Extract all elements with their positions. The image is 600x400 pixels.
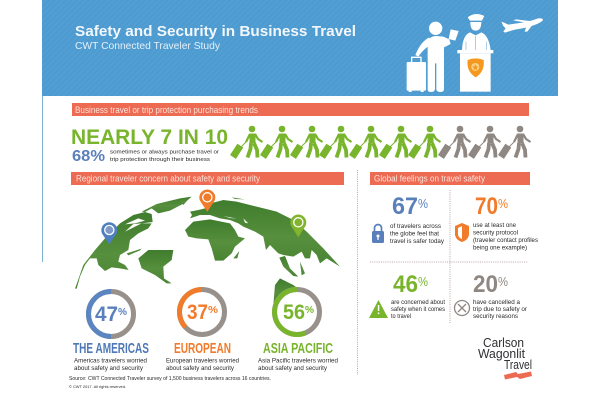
stat: 67 percent: 67	[392, 193, 418, 220]
region label: European: European travelers worried	[166, 358, 239, 364]
icon: shield	[455, 223, 469, 242]
region label: European: EUROPEAN	[174, 340, 231, 357]
section bar: purchasing trends	[72, 103, 529, 116]
region label: Asia Pacific: ASIA PACIFIC	[263, 340, 333, 357]
region label: the Americas: THE AMERICAS	[73, 340, 149, 357]
map pin: Americas	[101, 222, 117, 244]
stat: 20 percent: have cancelled a	[473, 299, 521, 306]
ring chart: Asia Pacific 56 percent: %	[305, 305, 314, 316]
ring chart: the Americas 47 percent: %	[118, 307, 127, 318]
text: 68 percent description	[110, 150, 219, 163]
ring chart: Asia Pacific 56 percent	[272, 287, 322, 337]
logo: Carlson Wagonlit Travel: Carlson	[483, 336, 524, 350]
map pin: Europe	[199, 190, 215, 212]
left page edge line	[42, 96, 43, 262]
stat: 20 percent	[454, 271, 527, 320]
ring chart: European 37 percent	[177, 287, 227, 337]
stat: 70 percent: security protocol	[473, 230, 518, 236]
ring chart: the Americas 47 percent	[86, 289, 136, 339]
stat: 68 percent: 68%	[72, 148, 105, 165]
stat: 20 percent: security reasons	[473, 313, 518, 320]
region label: Asia Pacific: about safety and security	[258, 365, 328, 372]
map: the Americas	[75, 197, 192, 289]
map: Europe, Africa, Asia and Australia	[180, 197, 340, 305]
stat: 46 percent: 46	[393, 271, 418, 298]
map pin: Asia Pacific	[290, 215, 306, 237]
source note	[69, 376, 271, 389]
stat: 20 percent: %	[498, 274, 508, 289]
section bar: regional concern: Regional traveler concern about safety and security	[76, 174, 260, 184]
stat: 70 percent: being one example)	[473, 244, 527, 252]
stat: 67 percent: %	[418, 196, 428, 211]
stat: 20 percent: trip due to safety or	[473, 306, 527, 313]
region label: European	[166, 340, 239, 372]
source note: Source: CWT Connected Traveler survey of 1,500 business travelers across 16 countries.	[69, 376, 271, 382]
stat: 46 percent	[369, 271, 445, 320]
source note: © CWT 2017. All rights reserved.	[69, 384, 126, 389]
stat: 67 percent	[372, 193, 445, 245]
region label: Asia Pacific: Asia Pacific travelers worried	[258, 358, 338, 364]
region label: the Americas: about safety and security	[74, 365, 144, 372]
ring chart: European 37 percent: %	[208, 305, 218, 316]
stat: 46 percent: safety when it comes	[391, 306, 445, 313]
stat: 67 percent: of travelers across	[390, 223, 441, 230]
header banner	[42, 0, 558, 96]
pictogram: ten walking travelers, seven green	[230, 126, 530, 159]
stat: 20 percent: 20	[473, 271, 498, 298]
icon: padlock	[372, 225, 384, 243]
ring chart: Asia Pacific 56 percent: 56	[283, 301, 305, 324]
section bar: regional concern	[71, 172, 344, 185]
stat: 67 percent: travel is safer today	[390, 238, 445, 245]
ring chart: European 37 percent: 37	[187, 301, 208, 324]
stat: 46 percent: to travel	[391, 313, 411, 320]
stat: 70 percent: use at least one	[473, 222, 517, 229]
logo: Carlson Wagonlit Travel: Wagonlit	[478, 347, 526, 361]
logo: Carlson Wagonlit Travel	[478, 336, 532, 380]
world map hemisphere	[75, 197, 340, 305]
section bar: global feelings	[370, 172, 530, 185]
stat: 70 percent	[455, 193, 538, 252]
region label: the Americas: Americas travelers worried	[74, 358, 147, 364]
title: Safety and Security in Business Travel	[75, 24, 356, 40]
text: 68 percent description: trip protection through their business	[110, 157, 210, 163]
dotted dividers	[358, 170, 528, 375]
stat: 70 percent: %	[498, 196, 508, 211]
stat: 70 percent: (traveler contact profiles	[473, 237, 538, 244]
icon: warning triangle	[369, 300, 388, 318]
region label: European: about safety and security	[166, 365, 235, 372]
stat: 67 percent: the globe feel that	[390, 230, 439, 238]
logo: Carlson Wagonlit Travel: Travel	[504, 358, 532, 372]
icon: circled cross	[454, 300, 470, 316]
ring chart: the Americas 47 percent: 47	[95, 303, 118, 326]
text: 68 percent description: sometimes or always purchase travel or	[110, 150, 219, 156]
section bar: purchasing trends: Business travel or trip protection purchasing trends	[75, 105, 258, 116]
headline: nearly 7 in 10: NEARLY 7 IN 10	[71, 125, 228, 149]
section bar: global feelings: Global feelings on travel safety	[374, 174, 485, 184]
subtitle: CWT Connected Traveler Study	[75, 40, 221, 52]
stat: 46 percent: %	[418, 274, 428, 289]
region label: the Americas	[73, 340, 149, 372]
stat: 70 percent: 70	[475, 193, 498, 220]
region label: Asia Pacific	[258, 340, 338, 372]
icon: traveler with suitcase and officer at podium	[407, 14, 543, 92]
stat: 46 percent: are concerned about	[391, 299, 445, 306]
